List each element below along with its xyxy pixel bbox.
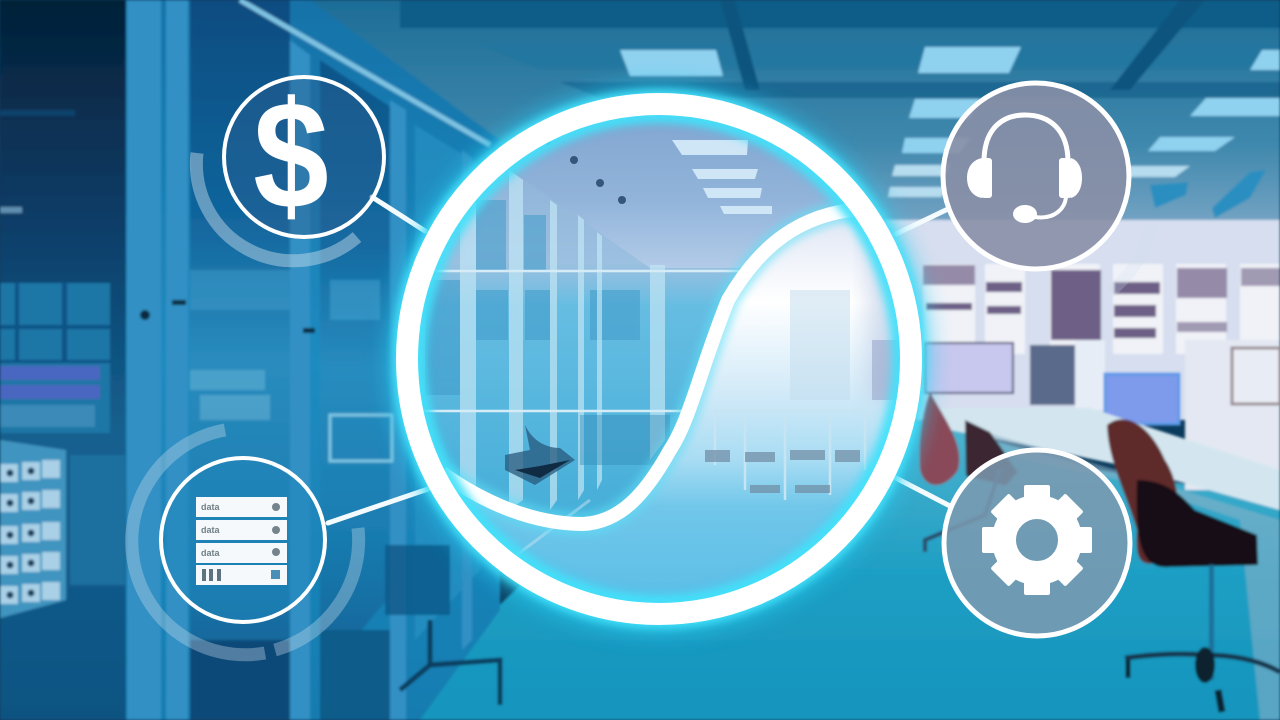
curve glow [442, 209, 860, 524]
s-curve [442, 209, 860, 524]
door handles [140, 310, 150, 320]
interior glass frames [460, 172, 665, 510]
floor [380, 420, 1280, 720]
connector lines [328, 197, 950, 523]
circle interior [420, 117, 896, 601]
connector: dollar [372, 197, 425, 231]
central circle [395, 90, 925, 630]
icon: server [161, 458, 325, 622]
arc around dollar icon [196, 153, 357, 261]
chair right [1107, 419, 1178, 564]
monitors and desks [925, 343, 1013, 393]
outer glow [401, 97, 917, 621]
chair base behind gear [925, 470, 1000, 552]
connector: gear [896, 478, 950, 506]
chair left [919, 392, 959, 485]
interior racks and desk ghosts [790, 290, 850, 400]
glass wall left [125, 0, 500, 720]
decorative ring arcs [132, 153, 1152, 655]
icon: headset [943, 83, 1129, 269]
equipment behind glass [190, 270, 290, 310]
icon: gear [944, 450, 1130, 636]
left dark room [0, 0, 126, 720]
arcs around server icon [132, 430, 265, 655]
icon: server: data [201, 525, 220, 535]
connector: headset [896, 209, 948, 234]
interior ceiling [597, 230, 764, 268]
wall racks [923, 264, 1280, 354]
interior glass panes [425, 200, 640, 395]
ceiling lights [620, 47, 1280, 197]
arc around headset icon [1110, 225, 1152, 292]
icon: server: data [201, 548, 220, 558]
back wall [880, 220, 1280, 420]
right arc around server icon [275, 528, 359, 650]
interior lower right region below curve [471, 218, 897, 598]
interior floor diagonal [518, 498, 591, 554]
interior chair [505, 425, 575, 485]
inner glow [409, 106, 909, 612]
icon: server: data [201, 502, 220, 512]
icon: dollar [224, 69, 384, 241]
lavender shading at right [860, 252, 894, 401]
ceiling [0, 0, 1280, 240]
icon: dollar: $ [253, 69, 329, 241]
connector: server [328, 489, 428, 523]
glass frames [127, 0, 472, 720]
ring [407, 104, 911, 614]
